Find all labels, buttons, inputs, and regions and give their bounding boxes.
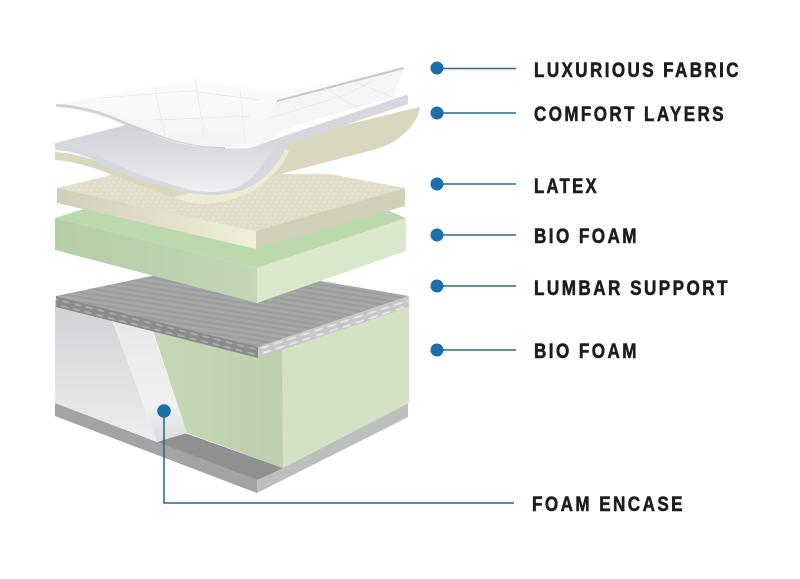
callout: comfort layers: COMFORT LAYERS [534, 103, 726, 126]
beige comfort sheet [55, 107, 420, 204]
quilting lines [100, 79, 395, 143]
callout: latex: LATEX [534, 175, 599, 198]
callout: luxurious fabric: LUXURIOUS FABRIC [534, 59, 741, 82]
cream lip of comfort sheet [173, 149, 289, 204]
green foam right side [282, 300, 409, 468]
callout: luxurious fabric [430, 59, 741, 82]
callout: foam encase: FOAM ENCASE [532, 493, 685, 516]
bio foam right side [257, 218, 406, 303]
callout: bio foam upper: BIO FOAM [534, 225, 639, 248]
fabric edge shadows [56, 104, 225, 148]
comfort sheet rim [55, 138, 288, 195]
callout: bio foam lower [430, 340, 639, 363]
lumbar support top [56, 263, 409, 347]
illustration: bio foam layer [55, 207, 406, 303]
latex top [57, 174, 405, 231]
illustration: bottom foam block with encase [55, 263, 409, 493]
latex front [57, 188, 256, 249]
grey side panel of encase [55, 300, 157, 442]
illustration: latex layer [57, 174, 405, 249]
white comfort sheet [55, 95, 408, 195]
bio foam front [55, 218, 257, 303]
lumbar support front edge [56, 296, 258, 358]
bio foam top [55, 207, 406, 268]
callout: lumbar support: LUMBAR SUPPORT [534, 277, 730, 300]
callout: foam encase [157, 404, 685, 516]
callout: latex [430, 175, 599, 198]
lumbar support right edge [258, 296, 409, 358]
callout: bio foam upper [430, 225, 639, 248]
latex right side [256, 188, 405, 249]
fabric underside fold [215, 68, 404, 147]
white encase strip [112, 318, 187, 442]
green foam front [152, 328, 283, 468]
comfort sheet back strip [280, 95, 408, 144]
illustration: comfort layers [55, 95, 420, 204]
callout: lumbar support [430, 277, 730, 300]
base: foam encase bottom edge [55, 403, 408, 493]
fabric sheet surface [56, 68, 403, 147]
illustration: luxurious fabric sheet [56, 67, 404, 148]
callout: comfort layers [430, 103, 726, 126]
callout: bio foam lower: BIO FOAM [534, 340, 639, 363]
